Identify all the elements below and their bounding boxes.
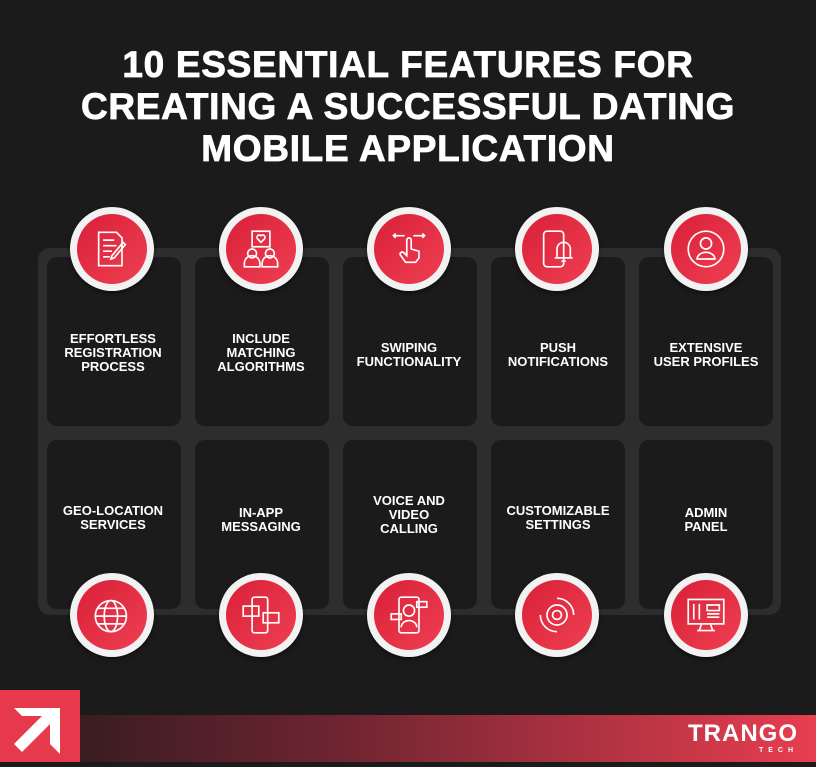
label 1: PROCESS	[81, 359, 145, 374]
label 4	[508, 340, 608, 369]
label 10	[684, 505, 728, 534]
card 9	[491, 440, 625, 609]
label 7	[221, 505, 301, 534]
label 1: EFFORTLESS	[70, 331, 156, 346]
label 7: IN-APP	[239, 505, 283, 520]
footer bar	[0, 715, 816, 762]
logo: arrow square	[0, 690, 80, 762]
logo: TRANGO TECH: TECH	[759, 747, 798, 754]
label 8: VOICE AND	[373, 493, 445, 508]
icon: globe	[70, 573, 154, 657]
label 5: EXTENSIVE	[670, 340, 742, 355]
label 8: CALLING	[380, 521, 438, 536]
label 3: SWIPING	[381, 340, 437, 355]
icon: messaging	[219, 573, 303, 657]
label 8	[373, 493, 445, 536]
card 1	[47, 257, 181, 426]
label 1: REGISTRATION	[64, 345, 162, 360]
card 5	[639, 257, 773, 426]
label 4: NOTIFICATIONS	[508, 354, 608, 369]
icon: matching	[219, 207, 303, 291]
icon: notification	[515, 207, 599, 291]
card 4	[491, 257, 625, 426]
label 9: CUSTOMIZABLE	[506, 503, 610, 518]
label 2: ALGORITHMS	[217, 359, 305, 374]
label 10: ADMIN	[685, 505, 727, 520]
label 8: VIDEO	[389, 507, 429, 522]
label 6: SERVICES	[80, 517, 146, 532]
icon: admin panel	[664, 573, 748, 657]
label 9: SETTINGS	[525, 517, 590, 532]
card 3	[343, 257, 477, 426]
title: MOBILE APPLICATION	[201, 128, 615, 169]
label 2: INCLUDE	[232, 331, 290, 346]
icon: settings	[515, 573, 599, 657]
logo: TRANGO TECH: TRANGO	[688, 720, 798, 747]
label 10: PANEL	[684, 519, 728, 534]
label 2	[217, 331, 305, 374]
label 7: MESSAGING	[221, 519, 301, 534]
label 4: PUSH	[540, 340, 576, 355]
panel: features grid	[38, 248, 781, 615]
label 3: FUNCTIONALITY	[357, 354, 461, 369]
label 2: MATCHING	[226, 345, 296, 360]
label 6	[63, 503, 163, 532]
label 5: USER PROFILES	[654, 354, 758, 369]
label 5	[654, 340, 758, 369]
title: CREATING A SUCCESSFUL DATING	[81, 86, 735, 127]
card 6	[47, 440, 181, 609]
card 2	[195, 257, 329, 426]
label 3	[357, 340, 461, 369]
icon: document	[70, 207, 154, 291]
card 7	[195, 440, 329, 609]
icon: video call	[367, 573, 451, 657]
title: 10 ESSENTIAL FEATURES FOR	[122, 44, 694, 85]
card 8	[343, 440, 477, 609]
label 6: GEO-LOCATION	[63, 503, 163, 518]
card 10	[639, 440, 773, 609]
title	[81, 44, 735, 169]
label 9	[506, 503, 610, 532]
label 1	[64, 331, 162, 374]
icon: user profile	[664, 207, 748, 291]
icon: swipe	[367, 207, 451, 291]
